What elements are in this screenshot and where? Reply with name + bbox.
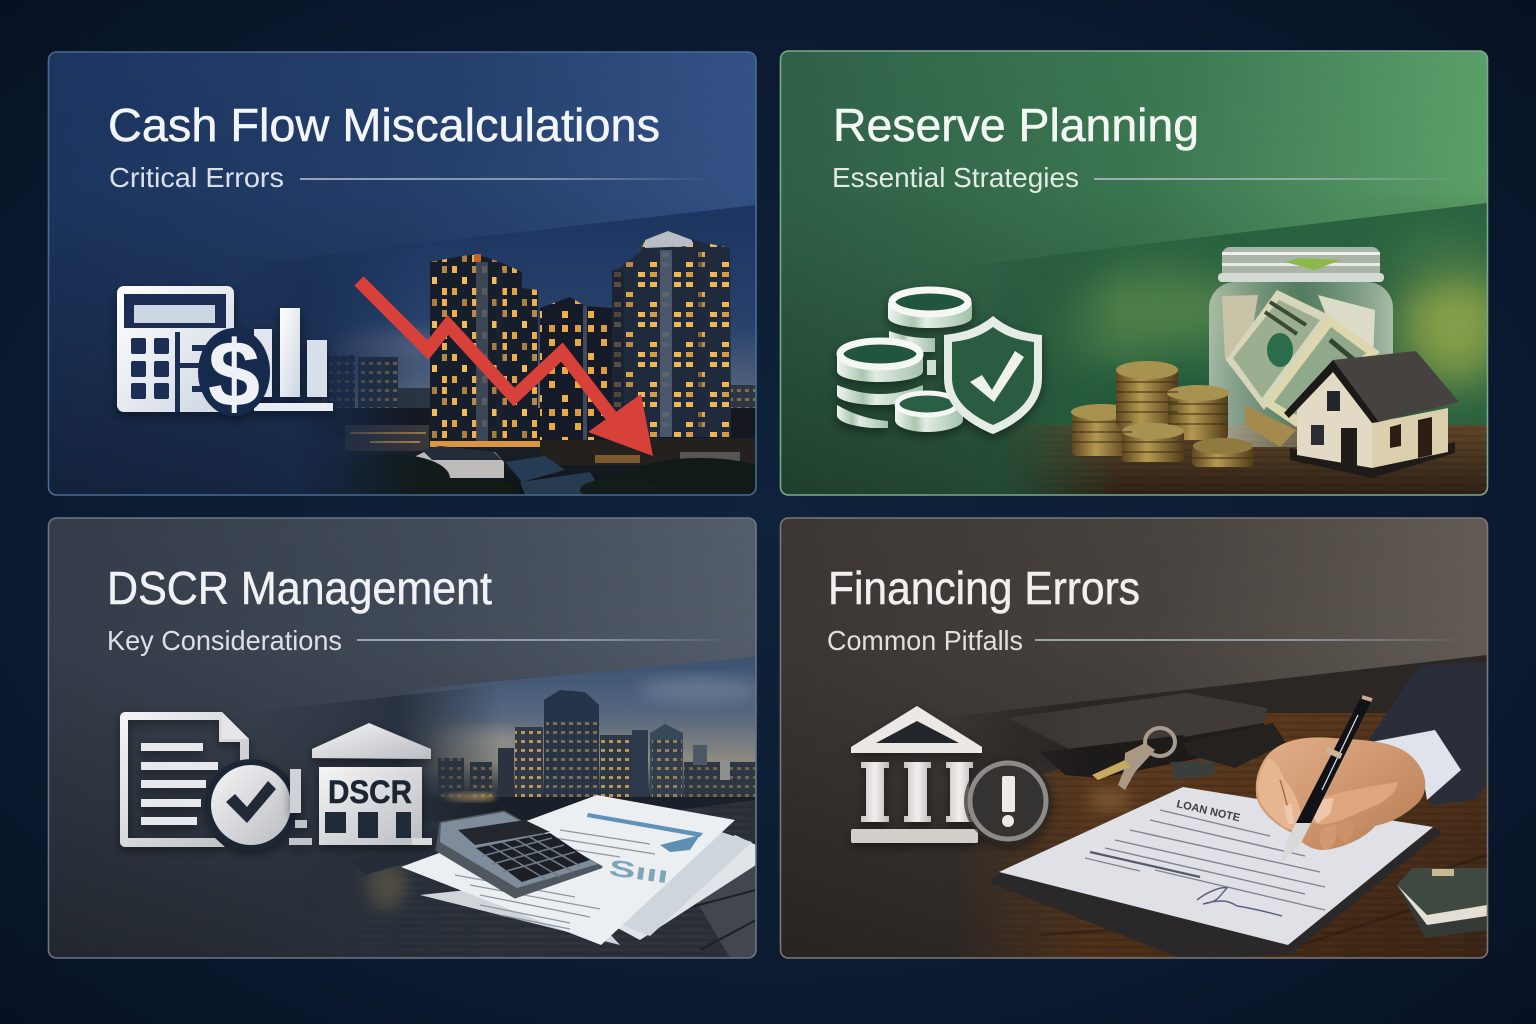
icon: bank with warning	[851, 706, 1052, 845]
panel 2 background	[780, 51, 1488, 495]
panel: cash flow miscalculations	[48, 52, 775, 506]
photo: calculator and financial papers: Sııı	[607, 854, 670, 888]
tower A	[430, 254, 538, 445]
photo: loan document in folder	[990, 787, 1442, 958]
subtitle: key considerations: Key Considerations	[107, 625, 342, 656]
subtitle: critical errors: Critical Errors	[109, 162, 284, 193]
photo: jar with cash	[1209, 247, 1393, 447]
tower B	[540, 297, 612, 440]
panel: financing errors	[780, 518, 1488, 958]
title: dscr management: DSCR Management	[107, 562, 492, 614]
photo: blurred greenery and wooden table	[1018, 203, 1487, 494]
photo: coin stacks	[1071, 361, 1254, 467]
photo: calculator and financial papers	[352, 795, 756, 945]
photo: suit sleeve and shirt cuff	[1367, 662, 1488, 805]
panel 4 background	[780, 518, 1488, 958]
arrow: falling red trend	[359, 281, 653, 456]
icon: calculator, dollar and bars	[117, 286, 333, 426]
photo: wooden desk	[960, 655, 1488, 958]
photo: stack of books	[1397, 868, 1487, 938]
title: financing errors: Financing Errors	[828, 562, 1140, 614]
photo: hand signing with pen	[1256, 697, 1425, 863]
photo: dark wooden desk	[360, 800, 756, 958]
icon: coin stacks with shield	[837, 290, 1042, 434]
icon: calculator, dollar and bars: $	[208, 321, 260, 426]
panel 1 background	[48, 52, 756, 495]
title: reserve planning: Reserve Planning	[833, 99, 1199, 151]
title: cash flow miscalculations: Cash Flow Miscalculations	[108, 99, 660, 151]
label: dscr: DSCR	[328, 774, 412, 810]
subtitle: common pitfalls: Common Pitfalls	[827, 625, 1023, 656]
photo: city skyline at dusk	[412, 657, 756, 821]
icon: dscr building	[289, 723, 432, 845]
subtitle: essential strategies: Essential Strategies	[832, 162, 1079, 193]
icon: document with check	[120, 712, 297, 851]
panel: reserve planning	[780, 51, 1510, 495]
panel 3 background	[48, 518, 756, 958]
photo: miniature house	[1284, 351, 1459, 478]
panel: dscr management	[48, 518, 760, 958]
photo: night apartment towers	[314, 210, 756, 494]
tower C	[612, 231, 731, 437]
ground, houses and trees	[540, 440, 756, 465]
photo: keys	[1092, 728, 1215, 790]
document heading: LOAN NOTE	[1175, 798, 1241, 824]
